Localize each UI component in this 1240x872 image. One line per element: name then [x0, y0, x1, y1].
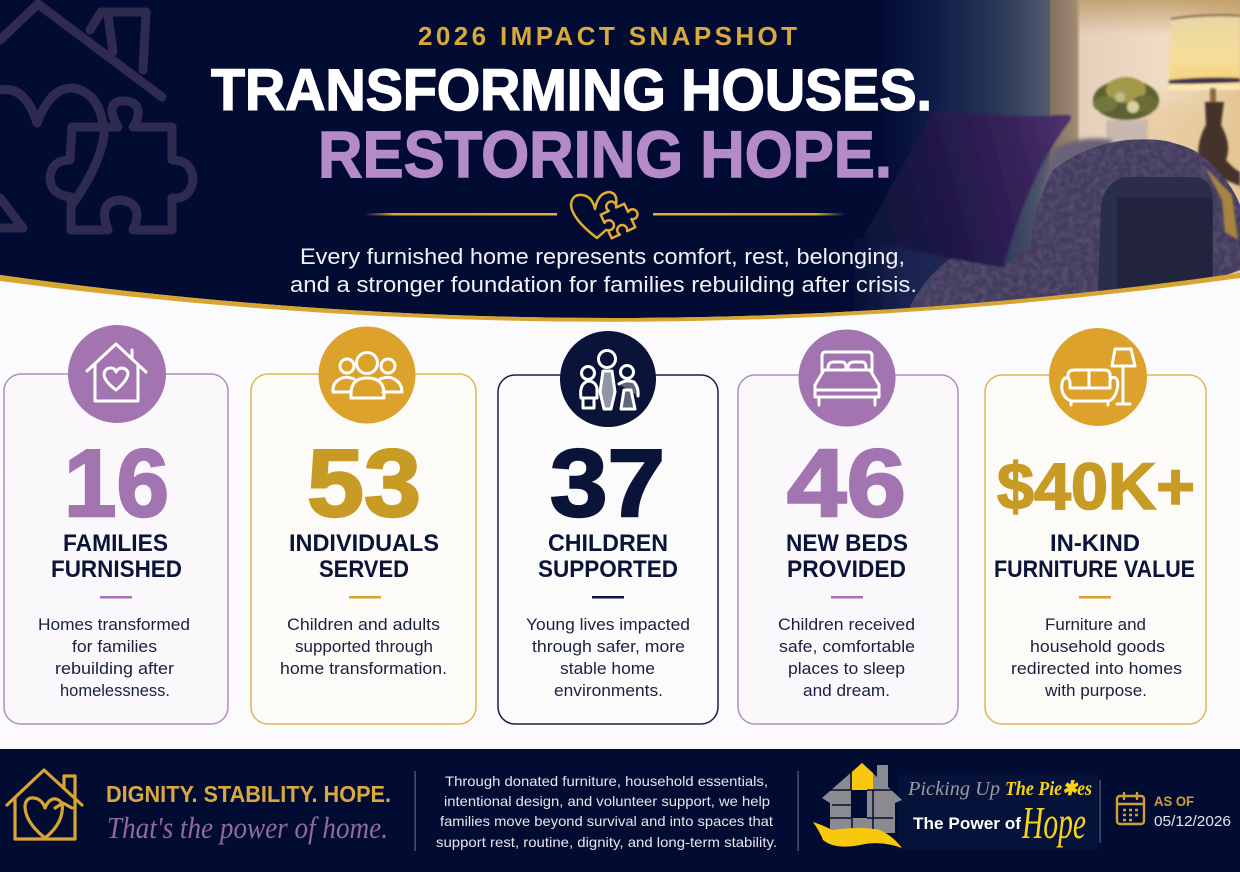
logo: Picking Up The Pieces: Picking Up	[907, 778, 1000, 800]
card: children supported	[498, 331, 718, 724]
description: homelessness.	[60, 682, 170, 700]
card: in-kind furniture value	[985, 328, 1206, 724]
description: redirected into homes	[1011, 660, 1182, 678]
label	[786, 530, 908, 583]
header subtitle: and a stronger foundation for families rebuilding after crisis.	[290, 272, 917, 297]
icon: family of three	[581, 350, 638, 409]
description: household goods	[1030, 638, 1165, 656]
footer band	[0, 749, 1240, 872]
mission statement: families move beyond survival and into spaces that	[440, 813, 773, 829]
stat: 37: 37	[550, 430, 665, 537]
as-of date: 05/12/2026	[1154, 814, 1231, 830]
logo: Picking Up The Pieces: The Power of	[913, 814, 1021, 833]
card: families furnished	[4, 325, 228, 724]
description: environments.	[554, 682, 663, 700]
description: Children received	[778, 616, 915, 634]
description: stable home	[560, 660, 655, 678]
label: FURNISHED	[51, 556, 182, 583]
header subtitle	[290, 244, 917, 297]
label: NEW BEDS	[786, 530, 908, 557]
description: home transformation.	[280, 660, 447, 678]
label	[994, 530, 1195, 583]
photo: cosy sofa with lamp	[862, 0, 1240, 310]
description: through safer, more	[532, 638, 685, 656]
stat: $40K+: $40K+	[997, 449, 1195, 523]
stat: 53: 53	[307, 430, 421, 537]
label: FURNITURE VALUE	[994, 556, 1195, 583]
description	[1011, 616, 1182, 700]
label: IN-KIND	[1050, 530, 1140, 557]
mission statement: Through donated furniture, household essentials,	[445, 773, 768, 789]
header subtitle: Every furnished home represents comfort, rest, belonging,	[300, 244, 905, 269]
title line two: RESTORING HOPE.	[318, 117, 892, 191]
icon: group of people	[333, 352, 402, 398]
icon: gold house with heart	[7, 770, 82, 839]
title line one: TRANSFORMING HOUSES.	[211, 58, 932, 123]
label	[538, 530, 678, 583]
script tagline: That's the power of home.	[107, 810, 388, 845]
label: INDIVIDUALS	[289, 530, 439, 557]
stat: 16: 16	[64, 430, 169, 537]
header banner	[0, 0, 1240, 330]
gold curve under the header	[0, 273, 1240, 322]
description: places to sleep	[788, 660, 905, 678]
description	[778, 616, 915, 700]
description: Furniture and	[1045, 616, 1146, 634]
description	[280, 616, 447, 678]
mission statement: intentional design, and volunteer support, we help	[444, 793, 770, 809]
label	[289, 530, 439, 583]
mission statement	[436, 773, 777, 850]
card: new beds provided	[738, 330, 958, 724]
description: Homes transformed	[38, 616, 190, 634]
icon: calendar	[1117, 793, 1144, 824]
description: supported through	[295, 638, 433, 656]
label: PROVIDED	[787, 556, 906, 583]
tagline: DIGNITY. STABILITY. HOPE.	[106, 781, 391, 807]
description: rebuilding after	[55, 660, 175, 678]
description	[526, 616, 690, 700]
mission statement: support rest, routine, dignity, and long-term stability.	[436, 834, 777, 850]
label: SERVED	[319, 556, 409, 583]
watermark: house, heart and puzzle outline	[0, 4, 193, 230]
description: for families	[72, 638, 157, 656]
label: FAMILIES	[63, 530, 168, 557]
description: Young lives impacted	[526, 616, 690, 634]
label: SUPPORTED	[538, 556, 678, 583]
as-of date: AS OF	[1154, 794, 1194, 809]
card: individuals served	[251, 326, 476, 724]
label	[51, 530, 182, 583]
divider with heart and puzzle icon	[365, 192, 845, 238]
description	[38, 616, 190, 700]
logo: Picking Up The Pieces: The Pie✱es	[1005, 778, 1092, 800]
description: and dream.	[803, 682, 890, 700]
label: CHILDREN	[548, 530, 668, 557]
icon: sofa and floor lamp	[1062, 349, 1135, 405]
logo: Picking Up The Pieces	[813, 763, 1098, 850]
description: safe, comfortable	[779, 638, 915, 656]
as-of date	[1154, 794, 1231, 830]
description: Children and adults	[287, 616, 440, 634]
logo: Picking Up The Pieces: Hope	[1021, 797, 1086, 848]
icon: bed	[815, 352, 879, 405]
header eyebrow: 2026 IMPACT SNAPSHOT	[418, 21, 797, 51]
stat: 46: 46	[787, 430, 906, 537]
description: with purpose.	[1044, 682, 1147, 700]
icon: house with heart	[87, 344, 146, 401]
